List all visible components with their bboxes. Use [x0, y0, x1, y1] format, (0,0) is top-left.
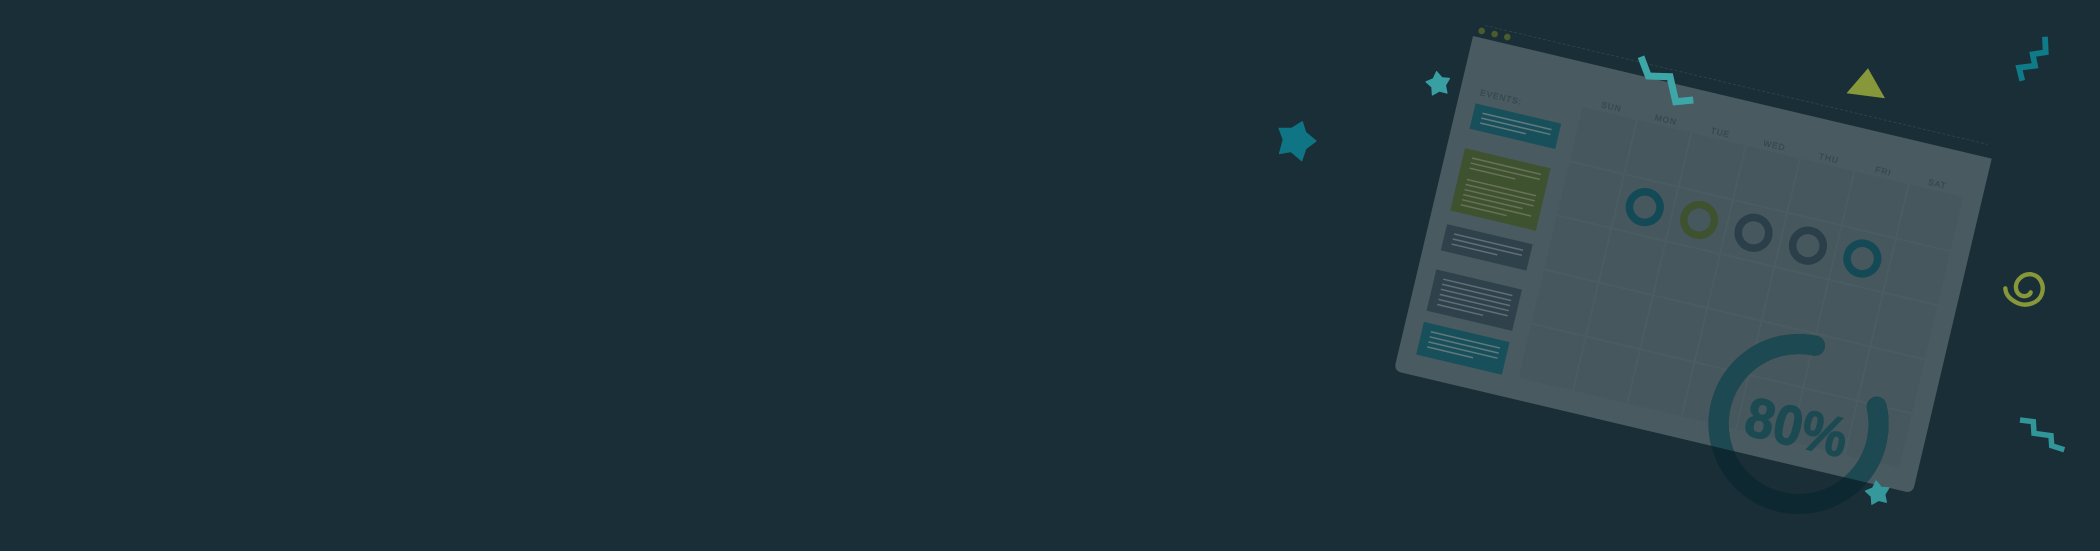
icon: small star bottom [1865, 481, 1889, 504]
event card 1: teal [1470, 103, 1561, 149]
events heading: EVENTS: [1479, 87, 1523, 107]
weekday labels: MON [1654, 112, 1678, 127]
weekday labels: SAT [1927, 177, 1948, 191]
progress value: 80% [1739, 384, 1854, 469]
window top dashed edge [1485, 25, 1988, 144]
icon: spiral [2005, 274, 2043, 305]
icon: zigzag bottom right [2020, 420, 2064, 450]
event card 2: green [1450, 148, 1551, 231]
event card 4: slate [1427, 269, 1522, 331]
panel background [1394, 36, 1992, 493]
calendar event rings [1626, 189, 1881, 277]
icon: zigzag top right [2019, 37, 2046, 81]
weekday labels: THU [1818, 151, 1840, 165]
weekday labels: FRI [1874, 164, 1893, 178]
event card 3: slate [1441, 224, 1533, 271]
calendar grid [1519, 107, 1963, 468]
icon: large star [1279, 122, 1316, 161]
calendar window [1394, 23, 1995, 493]
weekday labels [1600, 100, 1948, 191]
event card 5: teal [1416, 322, 1510, 375]
window control dots [1478, 27, 1511, 41]
weekday labels: SUN [1600, 100, 1623, 114]
progress ring 80 percent [1719, 344, 1879, 504]
weekday labels: TUE [1710, 125, 1731, 140]
icon: triangle [1846, 68, 1885, 98]
weekday labels: WED [1762, 138, 1787, 153]
icon: small star top left [1426, 72, 1450, 95]
icon: zigzag top [1641, 57, 1693, 102]
